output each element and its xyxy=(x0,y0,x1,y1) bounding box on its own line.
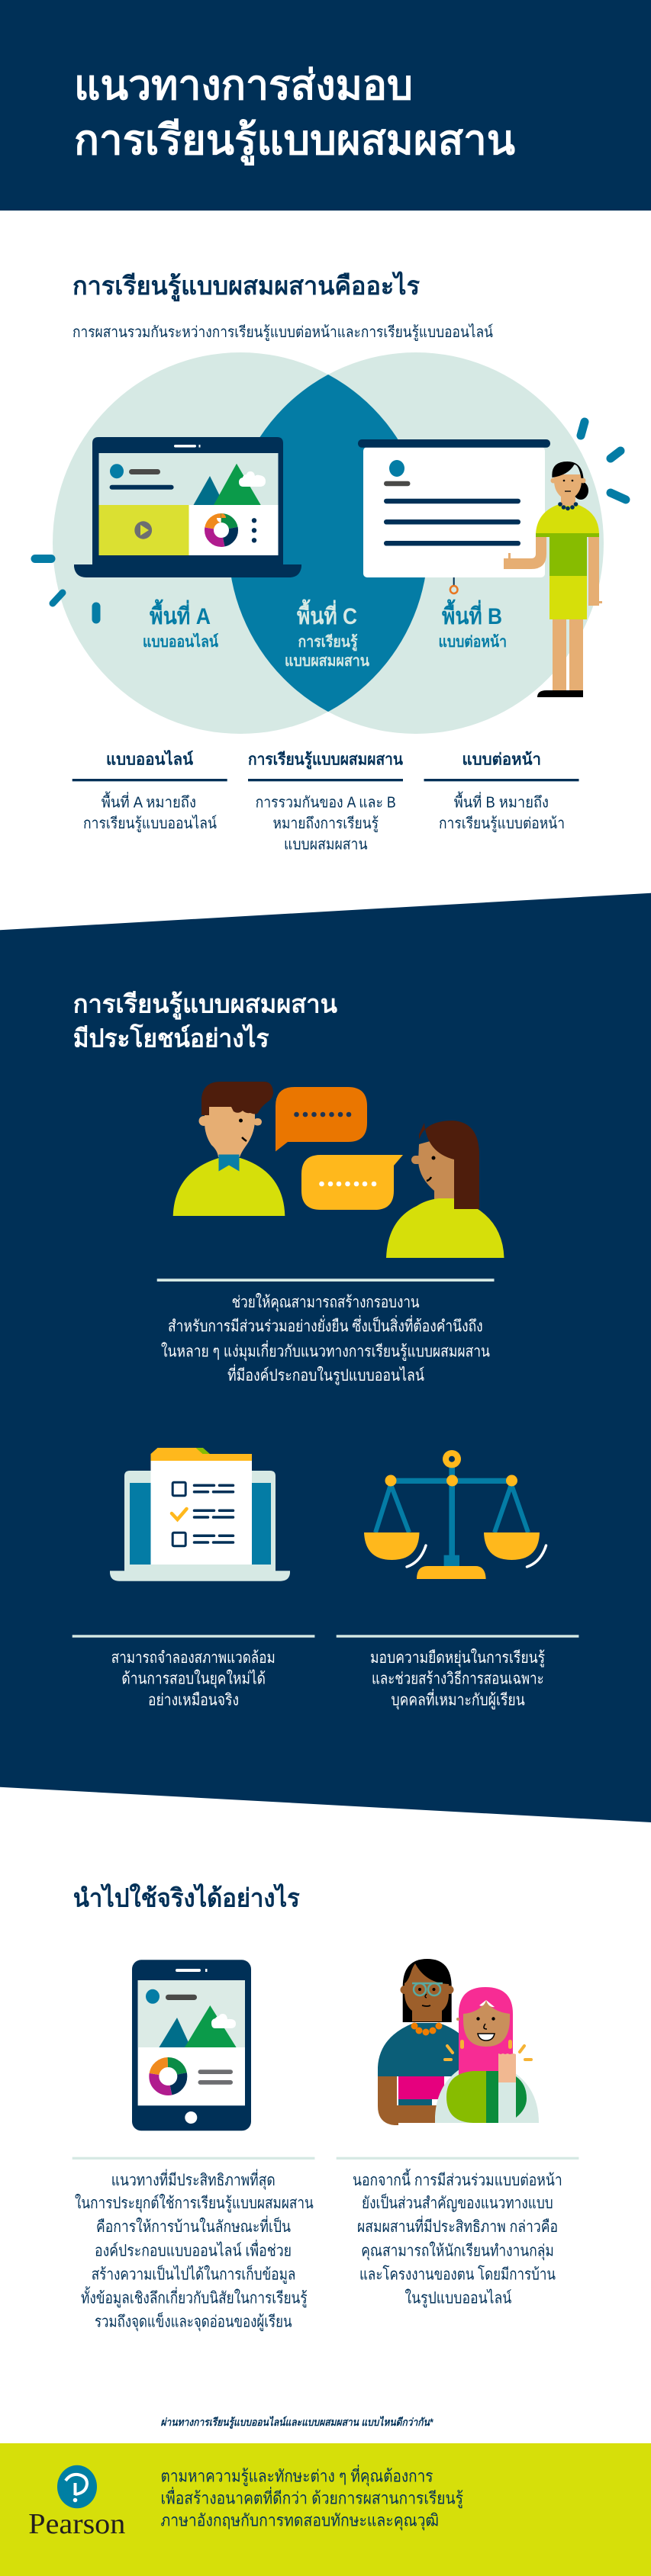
heading: benefits: การเรียนรู้แบบผสมผสาน xyxy=(73,990,337,1021)
column: online: แบบออนไลน์ xyxy=(106,750,194,769)
title: การเรียนรู้แบบผสมผสาน xyxy=(74,117,515,166)
column: blended: หมายถึงการเรียนรู้ xyxy=(273,815,379,833)
footnote: ผ่านทางการเรียนรู้แบบออนไลน์และแบบผสมผสาน แบบไหนดีกว่ากัน* xyxy=(160,2416,433,2429)
icon: smartphone xyxy=(132,1960,251,2131)
labels: area C: พื้นที่ C xyxy=(297,599,357,629)
text: face to face participation: นอกจากนี้ การมีส่วนร่วมแบบต่อหน้า xyxy=(353,2169,562,2189)
text: homework: องค์ประกอบแบบออนไลน์ เพื่อช่วย xyxy=(95,2239,292,2259)
icon: spark dashes right xyxy=(581,422,626,500)
illustration: man talking xyxy=(173,1082,285,1216)
text: homework: แนวทางที่มีประสิทธิภาพที่สุด xyxy=(111,2169,276,2190)
heading: what is blended learning: การเรียนรู้แบบผสมผสานคืออะไร xyxy=(73,271,420,302)
column: blended: แบบผสมผสาน xyxy=(284,837,368,854)
illustration: two students xyxy=(378,1959,539,2125)
text: homework: สร้างความเป็นไปได้ในการเก็บข้อมูล xyxy=(92,2263,295,2284)
text: simulate exam xyxy=(111,1649,276,1709)
column: face to face: พื้นที่ B หมายถึง xyxy=(454,791,549,811)
divider right xyxy=(337,1635,578,1638)
column: blended: การรวมกันของ A และ B xyxy=(256,794,396,811)
speech bubble: yellow xyxy=(301,1155,403,1210)
icon: balance scales xyxy=(364,1450,546,1579)
text: homework: ทั้งข้อมูลเชิงลึกเกี่ยวกับนิสัยในการเรียนรู้ xyxy=(81,2286,308,2307)
icon: presenter woman xyxy=(504,461,602,697)
header banner xyxy=(0,0,651,211)
text: homework: คือการให้การบ้านในลักษณะที่เป็น xyxy=(96,2215,291,2236)
divider left xyxy=(73,2157,314,2160)
labels: area C: การเรียนรู้ xyxy=(298,633,358,652)
title: แนวทางการส่งมอบ xyxy=(74,63,413,108)
icon: Pearson logo: Pearson xyxy=(28,2508,125,2540)
text: framework benefit: สำหรับการมีส่วนร่วมอย่างยั่งยืน ซึ่งเป็นสิ่งที่ต้องคำนึงถึง xyxy=(168,1315,483,1336)
text: flexibility: มอบความยืดหยุ่นในการเรียนรู้ xyxy=(370,1648,545,1667)
speech bubble: orange xyxy=(276,1087,367,1152)
text: homework xyxy=(75,2169,314,2332)
labels: area B: พื้นที่ B xyxy=(442,599,502,629)
panel: benefits background xyxy=(0,893,651,1822)
labels: area B: แบบต่อหน้า xyxy=(438,633,507,651)
footer text: เพื่อสร้างอนาคตที่ดีกว่า ด้วยการผสานการเรียนรู้ xyxy=(160,2486,463,2508)
icon: laptop with online course xyxy=(74,437,301,577)
venn diagram xyxy=(53,352,604,734)
text: framework benefit: ช่วยให้คุณสามารถสร้างกรอบงาน xyxy=(232,1293,420,1312)
text: homework: รวมถึงจุดแข็งและจุดอ่อนของผู้เรียน xyxy=(95,2311,292,2332)
icon: spark dashes left xyxy=(35,558,96,619)
column: blended: การเรียนรู้แบบผสมผสาน xyxy=(248,751,404,770)
footer text xyxy=(160,2464,463,2531)
text: face to face participation: และโครงงานของตน โดยมีการบ้าน xyxy=(359,2265,556,2283)
column: face to face xyxy=(424,751,578,833)
footer band xyxy=(0,2443,651,2576)
footer text: ภาษาอังกฤษกับการทดสอบทักษะและคุณวุฒิ xyxy=(160,2511,439,2531)
labels: area A: แบบออนไลน์ xyxy=(143,632,218,651)
labels: area C xyxy=(285,599,369,670)
heading: benefits: มีประโยชน์อย่างไร xyxy=(73,1023,269,1052)
column: face to face: แบบต่อหน้า xyxy=(462,751,541,769)
labels: area A: พื้นที่ A xyxy=(150,599,211,629)
text: face to face participation: คุณสามารถให้นักเรียนทำงานกลุ่ม xyxy=(361,2241,554,2260)
text: face to face participation: ยังเป็นส่วนสำคัญของแนวทางแบบ xyxy=(362,2192,553,2212)
column: online xyxy=(73,750,227,833)
heading: how to apply: นำไปใช้จริงได้อย่างไร xyxy=(73,1883,300,1912)
divider right xyxy=(337,2157,578,2160)
icon: laptop with test checklist xyxy=(110,1448,290,1581)
text: face to face participation: ในรูปแบบออนไลน์ xyxy=(404,2288,511,2307)
icon: Pearson logo xyxy=(28,2465,125,2540)
heading: benefits xyxy=(73,990,337,1052)
divider left xyxy=(73,1635,314,1638)
labels: area C: แบบผสมผสาน xyxy=(285,653,369,670)
text: flexibility: และช่วยสร้างวิธีการสอนเฉพาะ xyxy=(372,1671,544,1688)
text: face to face participation: ผสมผสานที่มีประสิทธิภาพ กล่าวคือ xyxy=(357,2215,558,2236)
column: blended xyxy=(248,751,404,854)
text: homework: ในการประยุกต์ใช้การเรียนรู้แบบผสมผสาน xyxy=(75,2194,314,2213)
text: flexibility: บุคคลที่เหมาะกับผู้เรียน xyxy=(391,1689,525,1710)
text: framework benefit: ที่มีองค์ประกอบในรูปแบบออนไลน์ xyxy=(227,1364,424,1385)
column: face to face: การเรียนรู้แบบต่อหน้า xyxy=(439,815,565,833)
text: framework benefit xyxy=(161,1293,490,1385)
illustration: woman talking xyxy=(386,1121,504,1258)
icon: projector screen xyxy=(358,439,550,593)
text: simulate exam: อย่างเหมือนจริง xyxy=(148,1692,239,1709)
text: face to face participation xyxy=(353,2169,562,2307)
column: online: การเรียนรู้แบบออนไลน์ xyxy=(83,815,217,833)
column: online: พื้นที่ A หมายถึง xyxy=(102,791,196,811)
text: simulate exam: สามารถจำลองสภาพแวดล้อม xyxy=(111,1649,276,1667)
text: simulate exam: ด้านการสอบในยุคใหม่ได้ xyxy=(121,1670,266,1689)
text: framework benefit: ในหลาย ๆ แง่มุมเกี่ยวกับแนวทางการเรียนรู้แบบผสมผสาน xyxy=(161,1339,490,1361)
intro text: การผสานรวมกันระหว่างการเรียนรู้แบบต่อหน้าและการเรียนรู้แบบออนไลน์ xyxy=(73,323,493,342)
footer text: ตามหาความรู้และทักษะต่าง ๆ ที่คุณต้องการ xyxy=(160,2464,433,2486)
title xyxy=(74,63,515,166)
labels: area A xyxy=(143,599,218,651)
divider xyxy=(157,1278,494,1282)
labels: area B xyxy=(438,599,507,651)
text: flexibility xyxy=(370,1648,545,1710)
